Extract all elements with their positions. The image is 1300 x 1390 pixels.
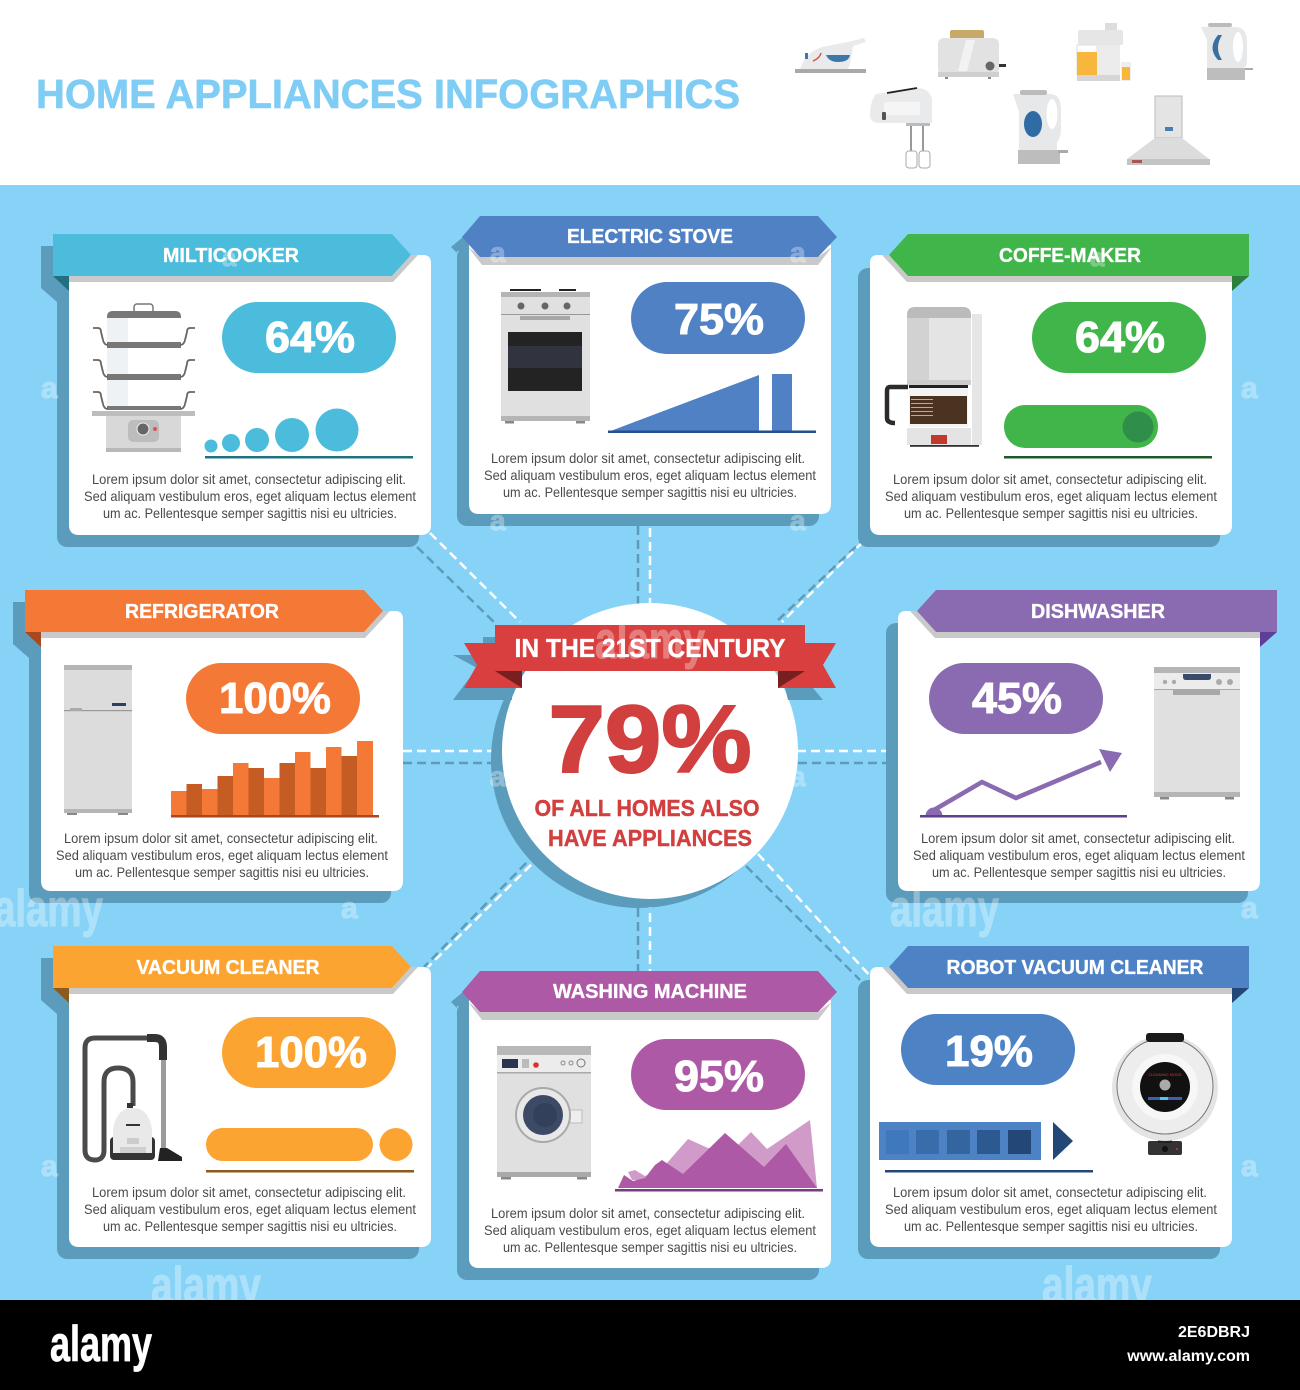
area chart <box>615 1120 823 1192</box>
watermarks: alamy <box>151 1257 261 1315</box>
text block: Sed aliquam vestibulum eros, eget aliquam lectus element <box>885 1201 1217 1217</box>
card frame <box>13 590 403 903</box>
text block: Lorem ipsum dolor sit amet, consectetur adipiscing elit. <box>92 1184 406 1200</box>
text block <box>885 471 1217 521</box>
percentage badge <box>1032 302 1206 373</box>
percentage badge: 64% <box>265 313 355 362</box>
text block: Sed aliquam vestibulum eros, eget aliquam lectus element <box>56 847 388 863</box>
watermarks: a <box>1241 1150 1258 1183</box>
text block <box>84 1184 416 1234</box>
wedge chart <box>608 374 816 433</box>
percentage badge: 19% <box>945 1027 1033 1076</box>
heading: ELECTRIC STOVE <box>567 226 733 248</box>
watermarks: a <box>222 242 237 272</box>
heading: ROBOT VACUUM CLEANER <box>946 957 1204 979</box>
text block: um ac. Pellentesque semper sagittis nisi eu ultricies. <box>503 484 797 500</box>
line chart with arrow <box>920 749 1127 818</box>
watermarks: a <box>341 892 358 925</box>
card frame <box>41 234 431 547</box>
text block <box>84 471 416 521</box>
title: HOME APPLIANCES INFOGRAPHICS <box>36 71 740 117</box>
text block: Lorem ipsum dolor sit amet, consectetur adipiscing elit. <box>893 1184 1207 1200</box>
text block: Lorem ipsum dolor sit amet, consectetur adipiscing elit. <box>921 830 1235 846</box>
icon: vacuum <box>85 1038 182 1161</box>
icon: robot vacuum: CLEANING MODE <box>1148 1072 1182 1077</box>
big number: 79% <box>548 686 752 793</box>
text block: um ac. Pellentesque semper sagittis nisi eu ultricies. <box>103 505 397 521</box>
percentage badge: 100% <box>255 1028 367 1077</box>
panel: electric stove <box>451 216 837 526</box>
percentage badge <box>222 302 396 373</box>
text block: um ac. Pellentesque semper sagittis nisi eu ultricies. <box>75 864 369 880</box>
statistic caption <box>534 795 760 851</box>
watermarks: a <box>41 372 58 405</box>
watermarks <box>0 237 1258 1315</box>
card frame <box>886 590 1277 903</box>
text block: Lorem ipsum dolor sit amet, consectetur adipiscing elit. <box>491 1205 805 1221</box>
text block <box>913 830 1245 880</box>
footer logo: alamy <box>50 1316 152 1372</box>
panel: washing machine <box>451 971 837 1280</box>
progress arrow chart <box>879 1122 1093 1172</box>
panel: multicooker <box>41 234 431 547</box>
watermarks: a <box>790 237 806 268</box>
text block: Lorem ipsum dolor sit amet, consectetur adipiscing elit. <box>92 471 406 487</box>
text block <box>484 1205 816 1255</box>
text block <box>484 450 816 500</box>
text block: Sed aliquam vestibulum eros, eget aliquam lectus element <box>913 847 1245 863</box>
statistic caption: OF ALL HOMES ALSO <box>534 795 760 821</box>
ribbon shadow <box>453 637 823 700</box>
heading: MILTICOOKER <box>163 245 300 267</box>
percentage badge <box>631 282 805 354</box>
text block: Lorem ipsum dolor sit amet, consectetur adipiscing elit. <box>64 830 378 846</box>
icon: kettle small <box>1201 23 1253 80</box>
percentage badge <box>901 1014 1075 1085</box>
watermarks: a <box>490 761 506 792</box>
icon: steamer <box>92 304 195 452</box>
watermarks: a <box>1241 892 1258 925</box>
ribbon <box>464 625 836 688</box>
text block <box>56 830 388 880</box>
statistic caption: HAVE APPLIANCES <box>548 825 752 851</box>
icon: robot vacuum <box>1112 1033 1218 1155</box>
percentage badge: 75% <box>674 295 764 344</box>
text block: Sed aliquam vestibulum eros, eget aliquam lectus element <box>484 1222 816 1238</box>
icon: dishwasher <box>1154 667 1240 800</box>
progress chart <box>206 1128 414 1172</box>
central statistic <box>453 603 836 908</box>
percentage badge: 95% <box>674 1052 764 1101</box>
icon: hand mixer <box>870 88 932 168</box>
footer image id: www.alamy.com <box>1126 1348 1250 1365</box>
panel: vacuum cleaner <box>41 946 431 1259</box>
watermarks: alamy <box>595 612 705 670</box>
text block <box>885 1184 1217 1234</box>
text block: um ac. Pellentesque semper sagittis nisi eu ultricies. <box>103 1218 397 1234</box>
header band <box>0 0 1300 185</box>
icon: coffee machine <box>887 307 982 447</box>
header appliance icons <box>795 23 1253 168</box>
circle shadow <box>491 612 787 908</box>
text block: Lorem ipsum dolor sit amet, consectetur adipiscing elit. <box>491 450 805 466</box>
icon: kettle large <box>1013 90 1068 164</box>
watermarks: alamy <box>1042 1257 1152 1315</box>
text block: Sed aliquam vestibulum eros, eget aliquam lectus element <box>84 1201 416 1217</box>
text block: um ac. Pellentesque semper sagittis nisi eu ultricies. <box>904 505 1198 521</box>
watermarks: a <box>490 237 506 268</box>
text block: Sed aliquam vestibulum eros, eget aliquam lectus element <box>84 488 416 504</box>
ribbon text: IN THE 21ST CENTURY <box>514 633 786 663</box>
heading: COFFE-MAKER <box>999 245 1142 267</box>
icon: cooker hood <box>1127 96 1210 165</box>
panel: coffee maker <box>858 234 1249 547</box>
circle <box>502 603 798 899</box>
icon: washing machine <box>497 1046 591 1180</box>
text block: Sed aliquam vestibulum eros, eget aliquam lectus element <box>484 467 816 483</box>
heading: VACUUM CLEANER <box>136 957 320 979</box>
percentage badge: 45% <box>972 674 1062 723</box>
icon: juicer <box>1077 23 1131 81</box>
watermarks: a <box>1241 372 1258 405</box>
bubble chart <box>204 408 413 458</box>
text block: Sed aliquam vestibulum eros, eget aliquam lectus element <box>885 488 1217 504</box>
percentage badge <box>222 1017 396 1088</box>
watermarks: a <box>41 1150 58 1183</box>
heading: DISHWASHER <box>1031 601 1166 623</box>
percentage badge <box>929 663 1103 734</box>
heading: WASHING MACHINE <box>553 981 747 1003</box>
toggle chart <box>1004 405 1212 458</box>
text block: Lorem ipsum dolor sit amet, consectetur adipiscing elit. <box>893 471 1207 487</box>
percentage badge: 100% <box>219 674 331 723</box>
connector lines <box>403 514 898 983</box>
text block: um ac. Pellentesque semper sagittis nisi eu ultricies. <box>932 864 1226 880</box>
text block: um ac. Pellentesque semper sagittis nisi eu ultricies. <box>904 1218 1198 1234</box>
watermarks: a <box>490 505 506 536</box>
watermarks: alamy <box>890 880 999 938</box>
footer bar <box>0 1300 1300 1390</box>
panel: dishwasher <box>886 590 1277 903</box>
heading: REFRIGERATOR <box>125 601 280 623</box>
card frame <box>451 216 837 526</box>
icon: refrigerator <box>64 665 132 815</box>
footer image id: 2E6DBRJ <box>1178 1324 1250 1341</box>
percentage badge <box>631 1039 805 1110</box>
card frame <box>41 946 431 1259</box>
percentage badge <box>186 663 360 734</box>
icon: stove <box>501 289 590 424</box>
watermarks: a <box>790 761 806 792</box>
card frame <box>451 971 837 1280</box>
card frame <box>858 946 1249 1259</box>
watermarks: a <box>1090 242 1105 272</box>
text block: um ac. Pellentesque semper sagittis nisi eu ultricies. <box>503 1239 797 1255</box>
card frame <box>858 234 1249 547</box>
panel: refrigerator <box>13 590 403 903</box>
watermarks: a <box>790 505 806 536</box>
percentage badge: 64% <box>1075 313 1165 362</box>
bar chart <box>171 741 379 818</box>
icon: toaster <box>938 30 1006 79</box>
footer image id <box>1126 1324 1250 1365</box>
panel: robot vacuum cleaner <box>858 946 1249 1259</box>
icon: iron <box>795 38 866 73</box>
